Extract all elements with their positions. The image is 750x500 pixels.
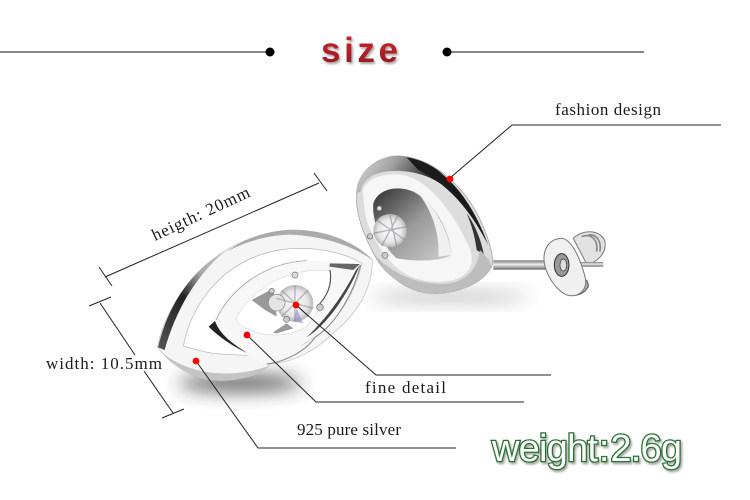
earring: front view: [157, 230, 372, 380]
top rim gradient: [357, 156, 442, 193]
callout: fine detail: [244, 332, 524, 402]
dimension: width: [89, 297, 184, 418]
inner opening: [236, 270, 330, 335]
label: height: heigth: 20mm: [149, 183, 253, 245]
inner band: [209, 261, 361, 364]
title: size: [321, 31, 398, 70]
weight label: weight : 2.6g: [491, 428, 682, 470]
gem: [252, 272, 323, 333]
post: [493, 260, 560, 270]
callout: 925 pure silver: [193, 358, 456, 448]
dark left rim: [158, 250, 227, 350]
inner recess: [373, 188, 452, 261]
callout: fashion design: fashion design: [555, 100, 662, 119]
window between bands: [183, 248, 362, 356]
back clutch: [544, 232, 605, 296]
bottom shade: [160, 351, 267, 380]
callout: stone: [293, 302, 551, 375]
title divider left: [0, 48, 274, 56]
dark inner lip: [209, 321, 247, 353]
dimension: height: [99, 173, 327, 286]
label: width: width: 10.5mm: [46, 354, 162, 373]
dark band: [407, 157, 488, 245]
floor shadows: [178, 292, 530, 392]
lower sheen: [467, 213, 484, 255]
callout: fine detail: fine detail: [365, 378, 446, 397]
top edge shading: [227, 230, 372, 260]
earring: side view: [356, 156, 605, 296]
outer body: [157, 230, 372, 380]
callout: 925 pure silver: 925 pure silver: [297, 420, 401, 439]
outer body: [356, 156, 493, 293]
callout: fashion design: [447, 100, 721, 182]
title divider right: [442, 48, 644, 56]
gem: [367, 206, 407, 258]
inner face: [363, 174, 472, 282]
